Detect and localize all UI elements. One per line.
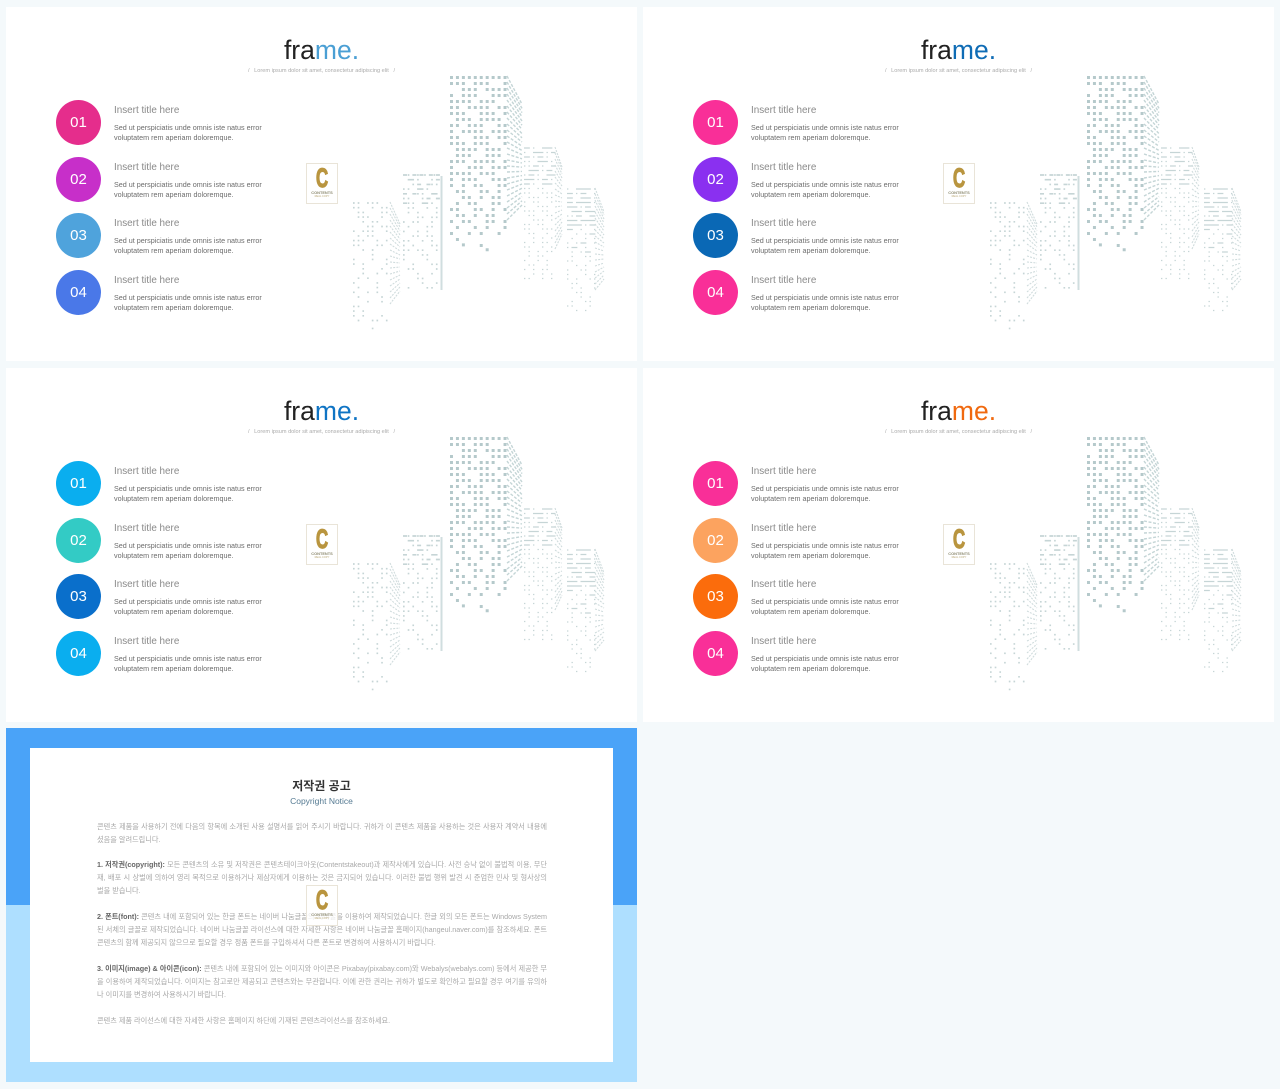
list item 02: Insert title here	[114, 162, 179, 173]
icon: contents logo: CONTENTS	[311, 190, 333, 195]
paragraph: copyright	[97, 860, 547, 895]
icon: contents logo	[943, 524, 975, 565]
list item 02: 02	[707, 171, 724, 188]
list item 01: Sed ut perspiciatis unde omnis iste natus error	[751, 123, 899, 132]
list item 04: Insert title here	[114, 275, 179, 286]
list item 04: Insert title here	[751, 275, 816, 286]
icon: contents logo	[943, 163, 975, 204]
list item 03: Insert title here	[751, 579, 816, 590]
heading: frame	[885, 35, 1032, 74]
list item 02: 02	[70, 171, 87, 188]
list item 03: Insert title here	[751, 218, 816, 229]
list item 01: Sed ut perspiciatis unde omnis iste natus error	[114, 484, 262, 493]
heading: frame	[248, 35, 395, 74]
list item 03: voluptatem rem aperiam doloremque.	[751, 246, 870, 255]
list item 02	[56, 157, 262, 202]
list item 04: voluptatem rem aperiam doloremque.	[751, 664, 870, 673]
list item 04	[56, 270, 262, 315]
list item 03: Insert title here	[114, 218, 179, 229]
icon: contents logo: C	[316, 524, 328, 554]
heading: frame: frame.	[284, 396, 359, 426]
list item 03: Sed ut perspiciatis unde omnis iste natus error	[751, 597, 899, 606]
list item 03	[56, 574, 262, 619]
list item 03: 03	[707, 227, 724, 244]
heading: frame: / Lorem ipsum dolor sit amet, consectetur adipiscing elit /	[248, 68, 395, 74]
list item 04: 04	[707, 645, 724, 662]
heading: frame: frame.	[921, 35, 996, 65]
paragraph: copyright: 벌을 받습니다.	[97, 886, 141, 895]
list item 03: Sed ut perspiciatis unde omnis iste natus error	[751, 236, 899, 245]
list item 04	[693, 631, 899, 676]
list item 03	[693, 574, 899, 619]
list item 02: Insert title here	[114, 523, 179, 534]
list item 03: voluptatem rem aperiam doloremque.	[751, 607, 870, 616]
icon: contents logo: REAL COPY	[315, 556, 329, 559]
list item 04: Sed ut perspiciatis unde omnis iste natus error	[114, 293, 262, 302]
list item 01: Sed ut perspiciatis unde omnis iste natus error	[751, 484, 899, 493]
list item 02	[56, 518, 262, 563]
list item 01	[56, 461, 262, 506]
list item 01: 01	[707, 475, 724, 492]
list item 02: voluptatem rem aperiam doloremque.	[114, 551, 233, 560]
list item 01: voluptatem rem aperiam doloremque.	[751, 494, 870, 503]
icon: contents logo	[306, 885, 338, 926]
list item 04: 04	[70, 645, 87, 662]
list item 01: Insert title here	[751, 466, 816, 477]
list item 01: Sed ut perspiciatis unde omnis iste natus error	[114, 123, 262, 132]
list item 01: 01	[707, 114, 724, 131]
icon: contents logo: CONTENTS	[948, 551, 970, 556]
heading: frame: / Lorem ipsum dolor sit amet, consectetur adipiscing elit /	[248, 429, 395, 435]
list item 04: Insert title here	[751, 636, 816, 647]
icon: contents logo: REAL COPY	[952, 195, 966, 198]
list item 04: 04	[70, 284, 87, 301]
list item 02: Insert title here	[751, 523, 816, 534]
list item 03: Insert title here	[114, 579, 179, 590]
notice card	[30, 748, 613, 1062]
paragraph: image and icon: 나 이미지를 변경하여 사용하시기 바랍니다.	[97, 990, 226, 999]
heading: frame: frame.	[921, 396, 996, 426]
panel: template slide 4, pink and orange	[643, 368, 1274, 722]
list item 02: Sed ut perspiciatis unde omnis iste natus error	[751, 541, 899, 550]
illustration: dotted city skyline	[990, 436, 1242, 690]
heading: copyright notice: 저작권 공고	[292, 779, 351, 793]
list item 02: Sed ut perspiciatis unde omnis iste natus error	[751, 180, 899, 189]
list item 04: Insert title here	[114, 636, 179, 647]
panel: copyright notice	[6, 728, 637, 1082]
panel: template slide 3, cyan and teal	[6, 368, 637, 722]
list item 02	[693, 157, 899, 202]
heading: frame: / Lorem ipsum dolor sit amet, consectetur adipiscing elit /	[885, 429, 1032, 435]
heading: frame: frame.	[284, 35, 359, 65]
icon: contents logo	[306, 163, 338, 204]
list item 03: voluptatem rem aperiam doloremque.	[114, 246, 233, 255]
list item 01: Insert title here	[114, 466, 179, 477]
list item 03: 03	[70, 588, 87, 605]
heading: copyright notice: Copyright Notice	[290, 796, 353, 806]
paragraph: font	[97, 912, 547, 947]
icon: contents logo: REAL COPY	[315, 195, 329, 198]
panel: template slide 1, magenta and blue	[6, 7, 637, 361]
list item 01	[693, 461, 899, 506]
icon: contents logo: C	[316, 163, 328, 193]
list item 03	[56, 213, 262, 258]
illustration: dotted city skyline	[353, 436, 604, 690]
list item 01: voluptatem rem aperiam doloremque.	[751, 133, 870, 142]
list item 02: voluptatem rem aperiam doloremque.	[751, 190, 870, 199]
icon: contents logo: C	[953, 524, 965, 554]
list item 01: 01	[70, 114, 87, 131]
list item 04: 04	[707, 284, 724, 301]
list item 04	[56, 631, 262, 676]
list item 02: 02	[70, 532, 87, 549]
illustration: dotted city skyline	[353, 76, 604, 330]
list item 02	[693, 518, 899, 563]
list item 03	[693, 213, 899, 258]
paragraph: image and icon	[97, 964, 547, 999]
intro paragraph: 셨음을 알려드립니다.	[97, 835, 161, 844]
list item 03: 03	[707, 588, 724, 605]
panel: template slide 2, pink and purple	[643, 7, 1274, 361]
icon: contents logo: REAL COPY	[315, 917, 329, 920]
icon: contents logo: CONTENTS	[948, 190, 970, 195]
list item 04: Sed ut perspiciatis unde omnis iste natus error	[114, 654, 262, 663]
icon: contents logo: C	[316, 885, 328, 915]
icon: contents logo	[306, 524, 338, 565]
list item 04	[693, 270, 899, 315]
illustration: dotted city skyline	[990, 76, 1242, 330]
list item 01: Insert title here	[751, 105, 816, 116]
heading: frame	[885, 396, 1032, 435]
list item 03: Sed ut perspiciatis unde omnis iste natus error	[114, 597, 262, 606]
list item 04: voluptatem rem aperiam doloremque.	[114, 303, 233, 312]
list item 02: Insert title here	[751, 162, 816, 173]
intro paragraph	[97, 822, 547, 844]
list item 01: voluptatem rem aperiam doloremque.	[114, 133, 233, 142]
icon: contents logo: CONTENTS	[311, 551, 333, 556]
heading: frame	[248, 396, 395, 435]
list item 01: voluptatem rem aperiam doloremque.	[114, 494, 233, 503]
list item 01: Insert title here	[114, 105, 179, 116]
list item 01	[693, 100, 899, 145]
list item 02: voluptatem rem aperiam doloremque.	[751, 551, 870, 560]
icon: contents logo: C	[953, 163, 965, 193]
list item 01: 01	[70, 475, 87, 492]
heading: frame: / Lorem ipsum dolor sit amet, consectetur adipiscing elit /	[885, 68, 1032, 74]
heading: copyright notice	[290, 779, 353, 806]
list item 03: Sed ut perspiciatis unde omnis iste natus error	[114, 236, 262, 245]
list item 03: 03	[70, 227, 87, 244]
list item 02: Sed ut perspiciatis unde omnis iste natus error	[114, 180, 262, 189]
list item 04: Sed ut perspiciatis unde omnis iste natus error	[751, 654, 899, 663]
paragraph: license: 콘텐츠 제품 라이선스에 대한 자세한 사항은 홈페이지 하단에 기재된 콘텐츠라이선스를 참조하세요.	[97, 1016, 390, 1025]
list item 02: 02	[707, 532, 724, 549]
list item 01	[56, 100, 262, 145]
icon: contents logo: REAL COPY	[952, 556, 966, 559]
list item 02: Sed ut perspiciatis unde omnis iste natus error	[114, 541, 262, 550]
list item 02: voluptatem rem aperiam doloremque.	[114, 190, 233, 199]
list item 03: voluptatem rem aperiam doloremque.	[114, 607, 233, 616]
list item 04: voluptatem rem aperiam doloremque.	[751, 303, 870, 312]
list item 04: voluptatem rem aperiam doloremque.	[114, 664, 233, 673]
paragraph: font: 콘텐츠의 함께 제공되지 않으므로 필요할 경우 정품 폰트를 구입하셔서 다른 폰트로 변경하여 사용하시기 바랍니다.	[97, 938, 436, 947]
list item 04: Sed ut perspiciatis unde omnis iste natus error	[751, 293, 899, 302]
icon: contents logo: CONTENTS	[311, 912, 333, 917]
